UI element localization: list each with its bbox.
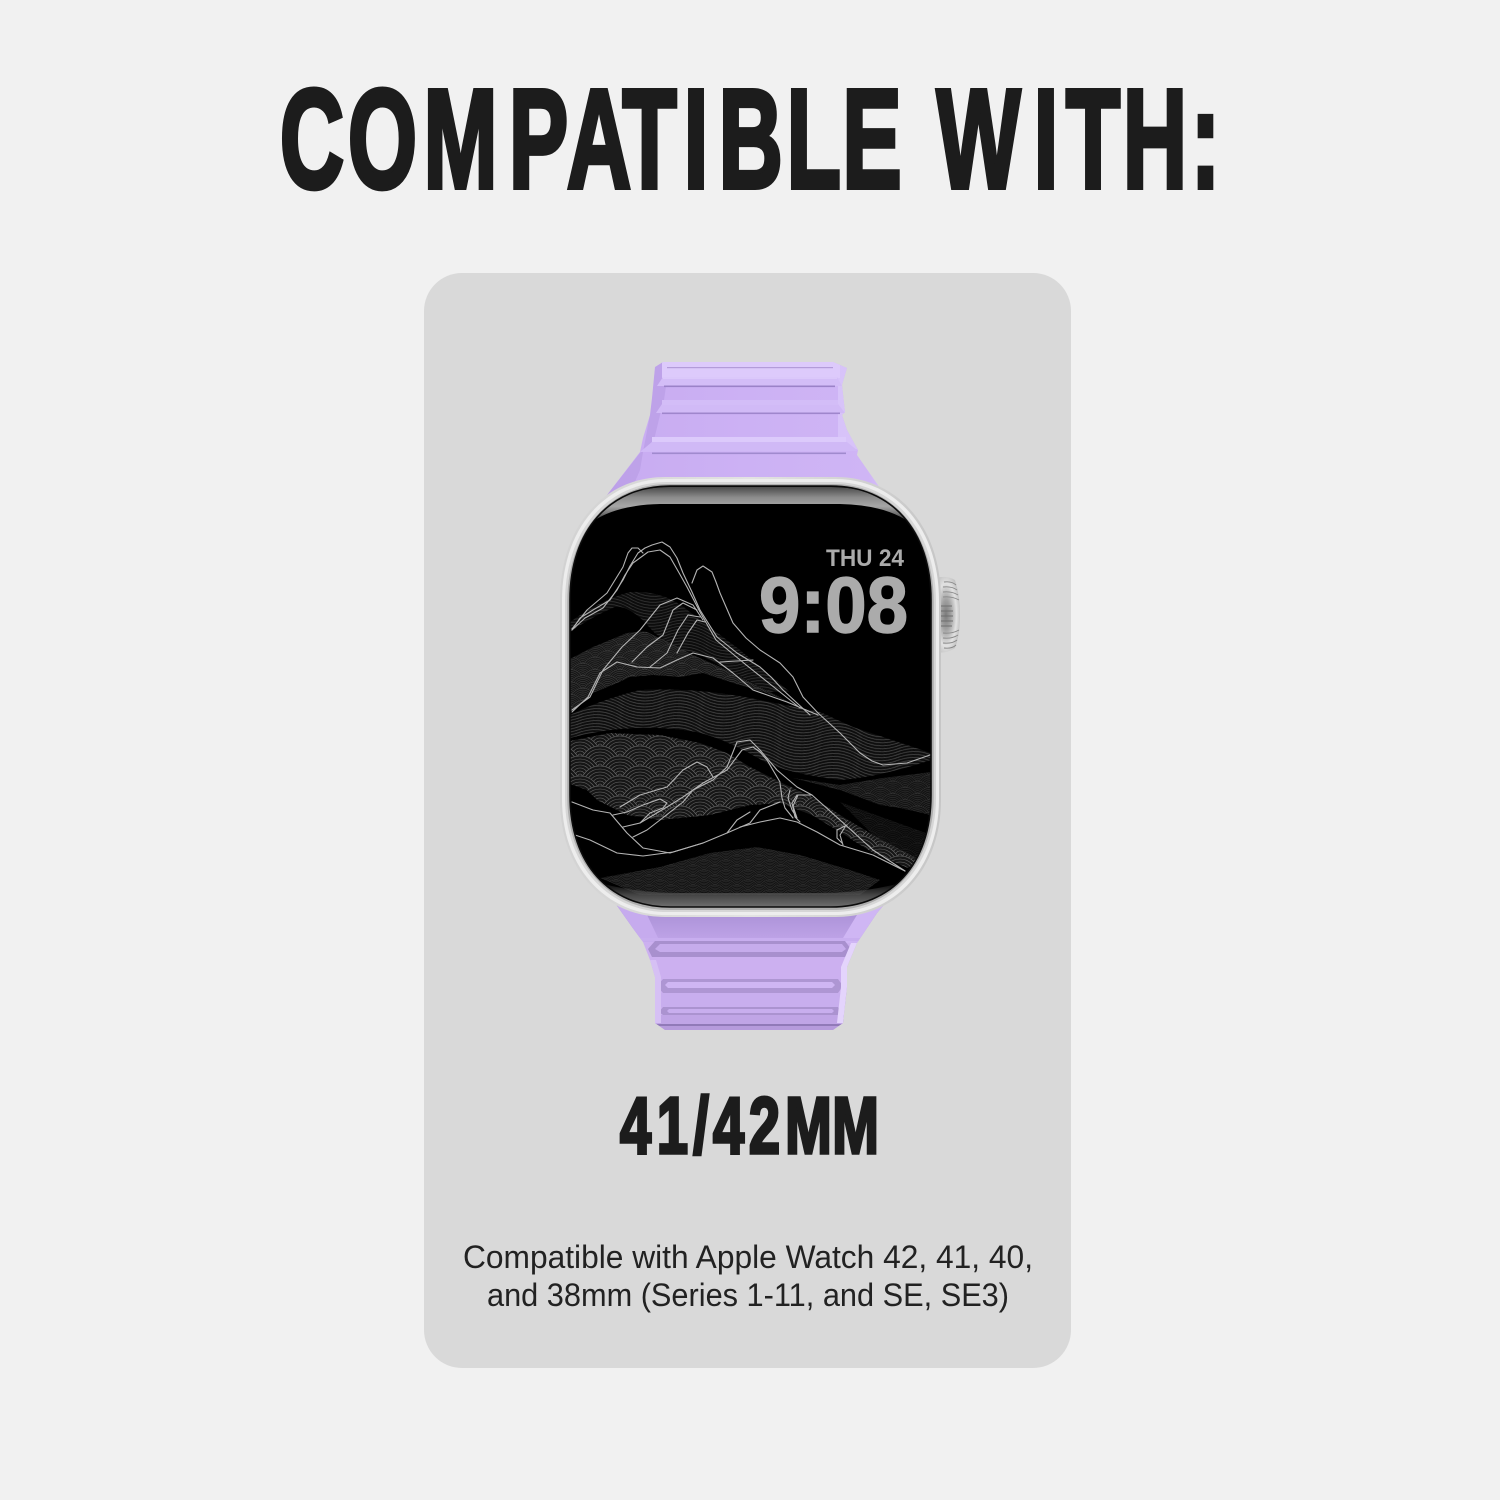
- right scallop band: [793, 772, 931, 815]
- case: [560, 477, 941, 917]
- upper band: [607, 362, 878, 495]
- far right scallop band: [840, 802, 931, 860]
- digital crown: [934, 577, 960, 652]
- glass reflection top: [596, 487, 904, 519]
- watch time: 9:08: [759, 560, 908, 649]
- wide wave band: [570, 689, 931, 780]
- contour lines: [572, 542, 930, 871]
- description: [463, 1239, 1033, 1313]
- description: and 38mm (Series 1-11, and SE, SE3): [487, 1277, 1009, 1313]
- lower band: [610, 900, 890, 1030]
- description: Compatible with Apple Watch 42, 41, 40,: [463, 1239, 1033, 1275]
- screen edge: [570, 486, 931, 907]
- size label: 41/42MM: [620, 1080, 879, 1170]
- title: COMPATIBLE WITH:: [280, 59, 1220, 217]
- lower scallop band: [600, 847, 880, 895]
- panel: 41/42mm card: [424, 273, 1071, 1368]
- screen: [570, 486, 931, 907]
- glass reflection bottom: [606, 884, 894, 906]
- middle scallop band: [570, 733, 920, 868]
- upper wave band: [570, 592, 790, 692]
- artwork: mountains: [570, 542, 931, 895]
- upper scallop band: [570, 632, 795, 712]
- watch illustration: [560, 360, 960, 1030]
- watch date: THU 24: [826, 545, 905, 572]
